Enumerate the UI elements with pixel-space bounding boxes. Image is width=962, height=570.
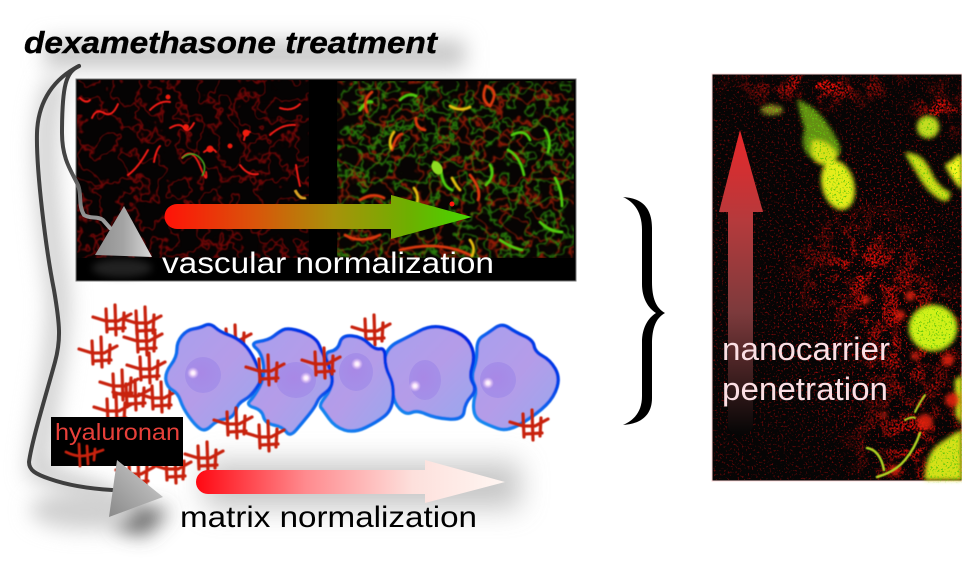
curly brace: [623, 197, 665, 425]
label: nanocarrier penetration: [722, 331, 890, 407]
hyaluronan fibres over cells: [214, 348, 548, 451]
arrow: red to green: [164, 195, 472, 239]
cell 1: [166, 325, 261, 430]
cell 2: [249, 329, 332, 434]
filament: [867, 395, 925, 477]
background shadows: [30, 40, 520, 535]
cell nuclei: [185, 353, 516, 400]
hyaluronan fibres behind cells: [79, 305, 390, 488]
triangle arrowhead: vascular: [92, 206, 152, 277]
title: dexamethasone treatment: [24, 25, 439, 60]
connector curves from treatment label: [29, 66, 112, 490]
label: nanocarrier penetration: nanocarrier: [722, 331, 890, 367]
micrograph: before treatment: [77, 80, 309, 258]
cell 4: [385, 327, 475, 419]
arrow: matrix normalization: [196, 460, 505, 503]
arrow: nanocarrier penetration: [719, 130, 763, 435]
label: vascular normalization: vascular normalization: [162, 247, 494, 280]
legend: hyaluronan: [51, 417, 183, 466]
cell 3: [320, 336, 393, 431]
labelled cells: yellow green clusters: [761, 100, 962, 480]
label: matrix normalization: matrix normalization: [180, 501, 477, 534]
micrograph: after treatment: [337, 81, 574, 258]
cell 5: [472, 325, 558, 429]
red hotspots: [862, 291, 959, 475]
label: nanocarrier penetration: penetration: [722, 371, 888, 407]
legend: hyaluronan: hyaluronan: [55, 419, 180, 445]
triangle arrowhead: matrix: [109, 460, 163, 517]
red speckle: [713, 75, 962, 480]
panel: nanocarrier penetration: [712, 74, 962, 481]
cells: [166, 325, 558, 434]
panel: vascular normalization: [76, 79, 576, 281]
